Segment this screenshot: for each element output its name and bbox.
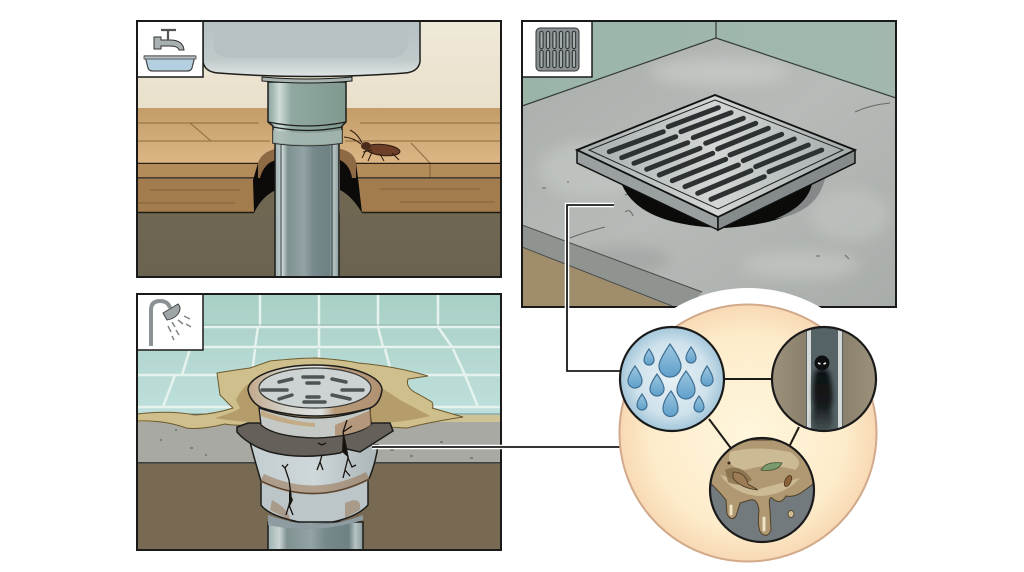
drain neck (259, 408, 371, 438)
dark hole under grate (622, 178, 825, 228)
concrete slab (138, 422, 500, 464)
drain rim and grate (248, 365, 382, 416)
icon: faucet and basin (137, 21, 203, 77)
pipe (275, 143, 339, 278)
icon: moisture droplets (620, 327, 724, 431)
connector: drain panel to circle (372, 445, 622, 449)
cracked slab plate (237, 423, 393, 456)
ground under floor (137, 212, 501, 278)
drain collar (261, 478, 368, 551)
pipe coupling (268, 82, 346, 146)
grate (577, 95, 855, 230)
icon: shadow in pipe (772, 327, 876, 432)
panel: square floor grate (522, 21, 896, 307)
cracks (282, 420, 356, 515)
cockroach (344, 130, 400, 161)
floor lip (137, 415, 501, 422)
ground below (137, 464, 501, 550)
sink basin (203, 20, 420, 83)
icon: grate (522, 21, 592, 77)
callout: white halo behind circle (603, 288, 893, 572)
panel: sink pipe through floor (137, 20, 501, 278)
leaf debris (761, 463, 782, 470)
panel: cracked floor drain (137, 294, 501, 551)
drain funnel (250, 442, 378, 494)
floor mottling (540, 58, 890, 279)
tiled floor (137, 294, 501, 416)
concrete floor (522, 38, 896, 307)
icon: shower head (137, 294, 203, 350)
floor cracks (542, 103, 890, 259)
callout: three conditions circle (620, 304, 876, 562)
grease stain (137, 358, 463, 428)
connector lines between conditions (709, 379, 799, 451)
wood floor surface (137, 108, 501, 212)
connector: grate panel to circle (567, 205, 622, 371)
floor front edge (522, 225, 702, 307)
grate slots (609, 108, 822, 199)
hole in floor (253, 149, 362, 213)
icon: grease and debris (705, 438, 820, 542)
corner walls (522, 21, 896, 106)
